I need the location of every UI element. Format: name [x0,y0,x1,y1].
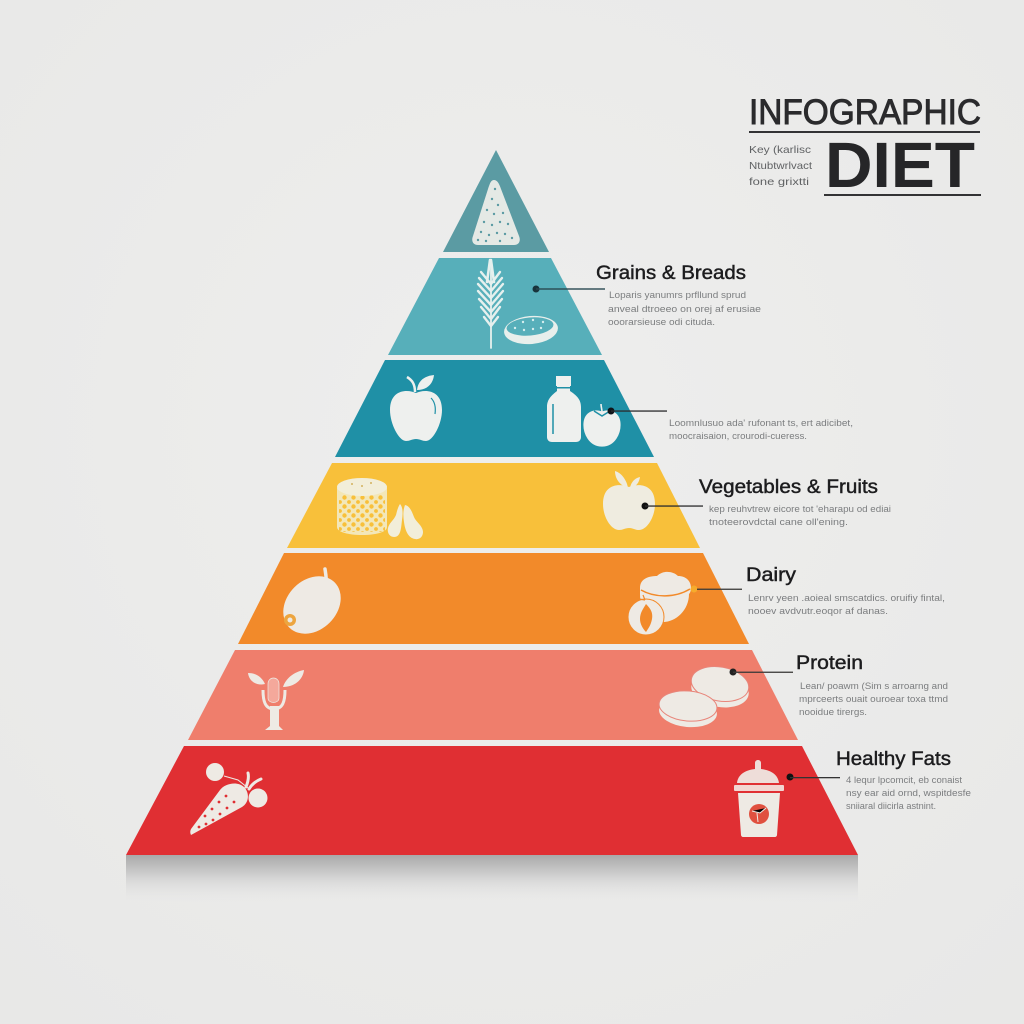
callout: healthy fats: 4 lequr lpcomcit, eb conaist [846,775,962,786]
callout: healthy fats [786,748,971,812]
icon: tablet stack [658,662,752,729]
callout: protein: mprceerts ouait ouroear toxa ttmd [799,694,948,705]
callout: vegetables and fruits: kep reuhvtrew eicore tot 'eharapu od ediai [709,504,891,515]
title: diet: DIET [825,129,975,201]
callout: vegetables and fruits [642,476,891,528]
callout: vegetables and fruits: Vegetables & Fruits [699,476,878,498]
callout: healthy fats: Healthy Fats [836,748,951,770]
callout: grains and breads: Grains & Breads [596,262,746,284]
title block [749,93,981,201]
tier 7: red [126,746,858,855]
tier 2: grains [388,258,602,355]
tier 6: salmon [188,650,798,740]
tier 3: teal [335,360,654,457]
icon: wheat [478,260,503,348]
icon: peach [628,595,664,635]
pyramid [126,150,858,855]
callout: grains and breads: anveal dtroeeo on orej af erusiae [608,304,761,315]
icon: yellow apple [603,471,655,530]
callout: dairy: Dairy [746,564,796,586]
callout: dairy: Lenrv yeen .aoieal smscatdics. oruifiy fintal, [748,593,945,604]
pyramid shadow [126,855,858,905]
icon: tomato [583,404,621,447]
icon: carrot and cherries [190,763,268,835]
callout: protein: Lean/ poawm (Sim s arroarng and [800,681,948,692]
callout: grains and breads: Loparis yanumrs prfllund sprud [609,290,746,301]
icon: goblet and leaves [248,670,304,730]
tier 1: top [443,150,549,252]
callout: healthy fats: nsy ear aid ornd, wspitdesfe [846,788,971,799]
icon: honeycomb barrel [337,478,387,535]
icon: round bread [503,314,559,346]
icon: apple [390,375,442,441]
tier 4: yellow [287,463,700,548]
icon: bowl [640,572,691,622]
icon: mango [272,565,352,645]
icon: grain triangle [472,180,520,245]
callout: dairy [690,564,945,617]
subtitle [749,144,812,188]
callout: unnamed teal tier: Loomnlusuo ada' rufonant ts, ert adicibet, [669,418,853,429]
callout: protein [730,652,948,718]
subtitle: Key (karlisc [749,144,811,156]
tier 5: orange [238,553,749,645]
callout: dairy: nooev avdvutr.eoqor af danas. [748,606,888,617]
title: infographic: INFOGRAPHIC [749,93,981,132]
callout: unnamed teal tier [608,408,853,442]
callout: unnamed teal tier: moocraisaion, crourodi-cueress. [669,431,807,442]
callout: grains and breads [532,262,761,328]
callout: healthy fats: sniiaral diicirla astnint. [846,801,936,812]
callout: protein: Protein [796,652,863,674]
subtitle: fone grixtti [749,176,809,188]
icon: bottle [547,376,581,442]
icon: pears [388,504,423,539]
icon: cup with lid [734,760,784,837]
subtitle: Ntubtwrlvact [749,160,812,172]
callout: vegetables and fruits: tnoteerovdctal cane oll'ening. [709,517,848,528]
callout: protein: nooidue tirergs. [799,707,867,718]
callout: grains and breads: ooorarsieuse odi cituda. [608,317,715,328]
